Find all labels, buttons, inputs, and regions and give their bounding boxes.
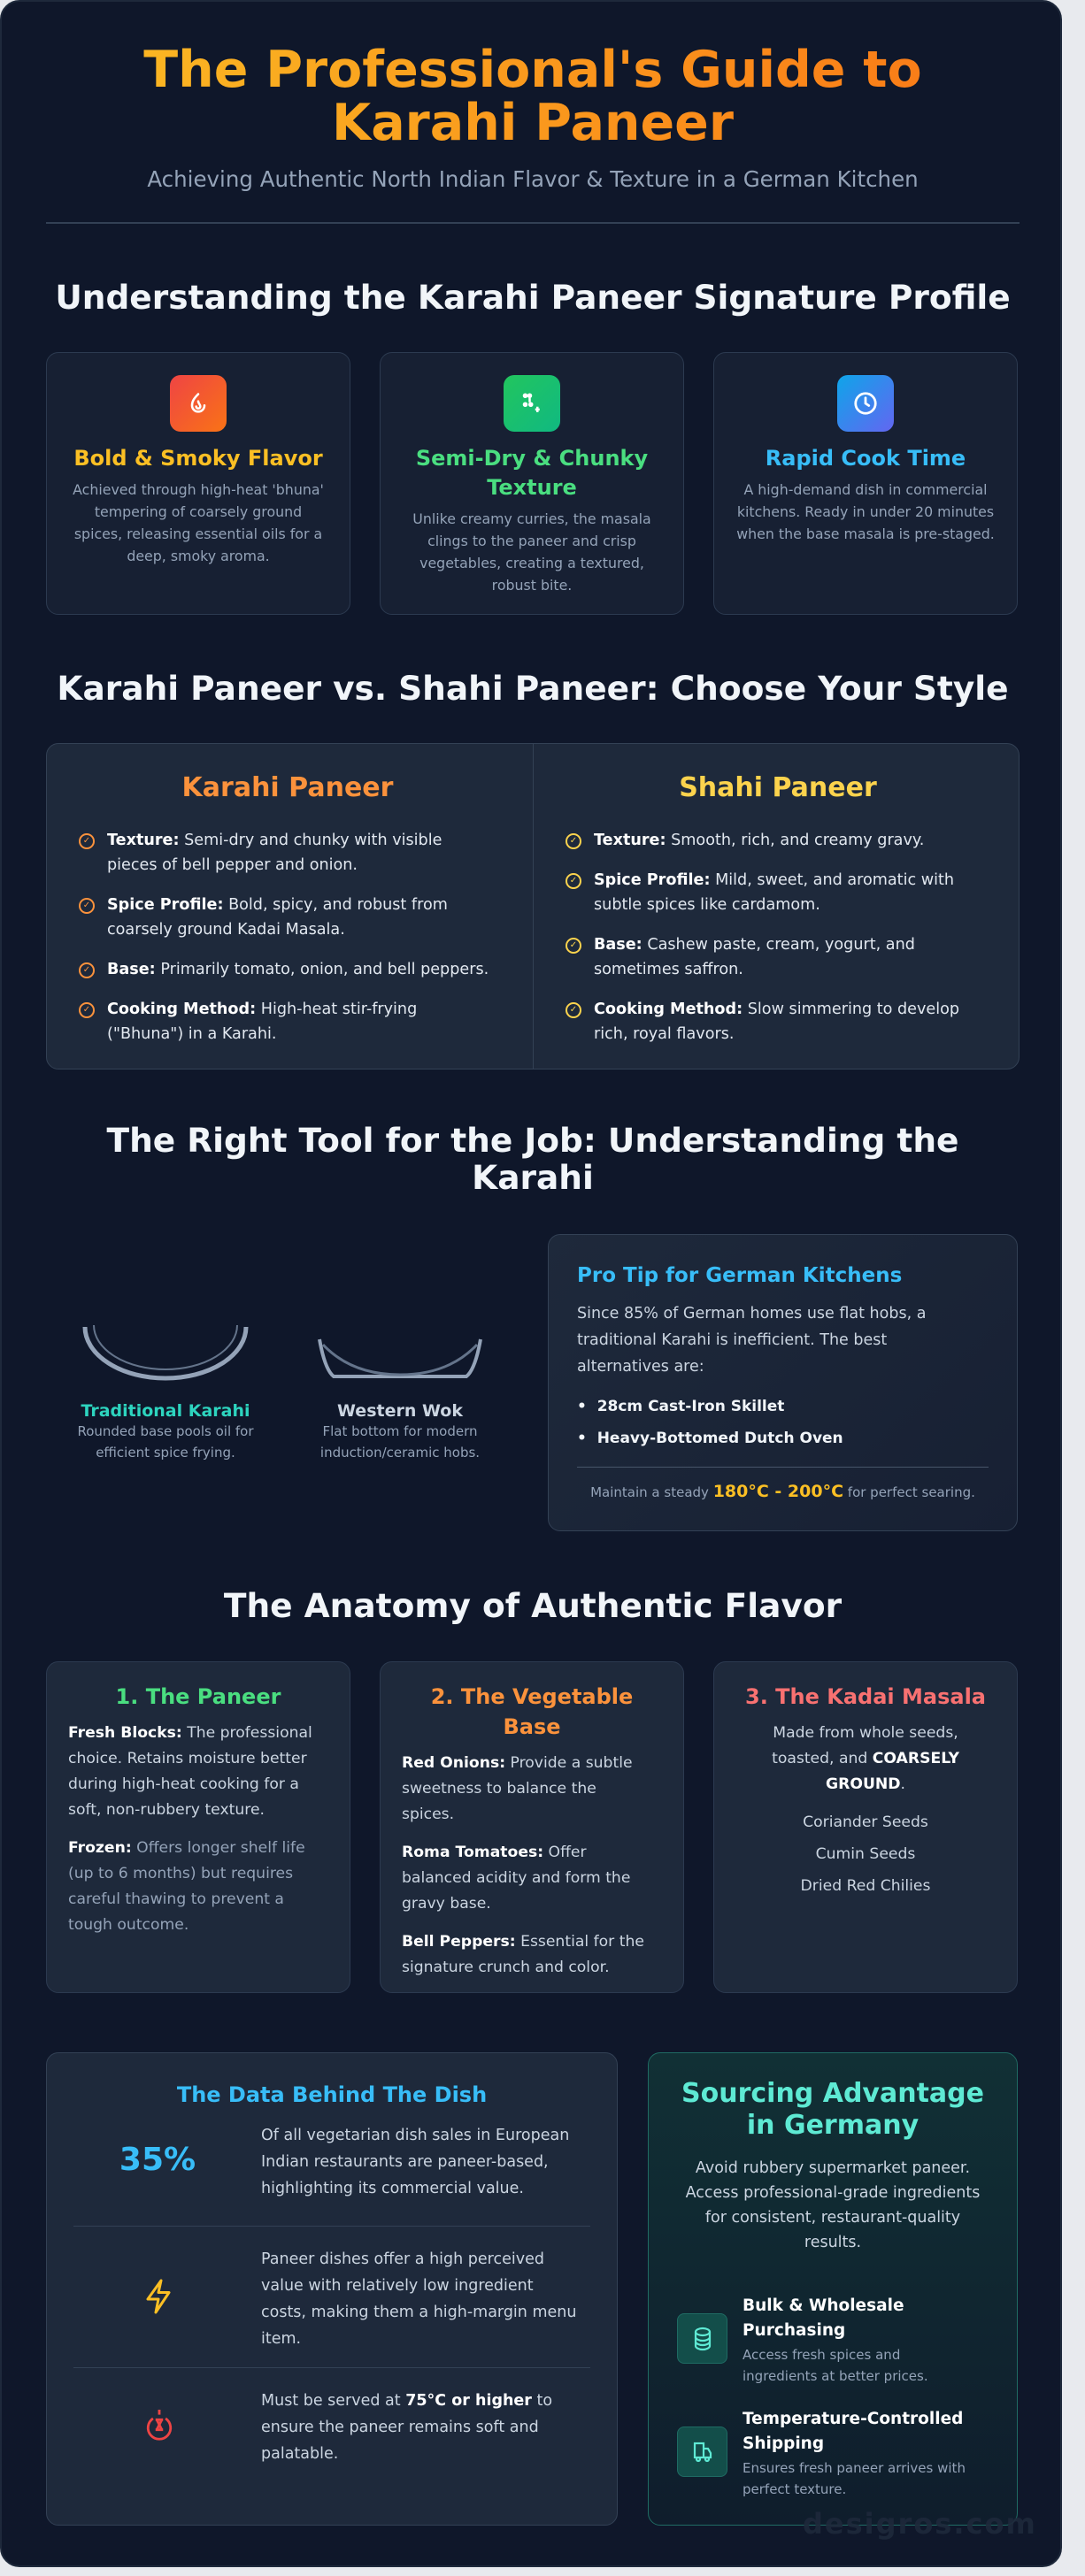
illustration: traditional karahi <box>77 1325 254 1460</box>
icon: chunks <box>504 375 560 432</box>
callout: pro tip: • 28cm Cast-Iron Skillet <box>577 1398 784 1415</box>
card: bold & smoky: Bold & Smoky Flavor <box>73 446 323 471</box>
heading: right tool: Karahi <box>472 1158 594 1197</box>
column: karahi: ✓ <box>83 901 90 910</box>
item: temperature shipping: Temperature-Controlled Shipping <box>743 2410 963 2453</box>
column: shahi: Shahi Paneer <box>679 772 877 803</box>
callout: pro tip: Maintain a steady 180°C - 200°C for perfect searing. <box>590 1482 975 1501</box>
card: paneer: 1. The Paneer <box>116 1684 281 1709</box>
card: kadai masala: Cumin Seeds <box>816 1845 915 1863</box>
column: shahi: ✓ <box>570 940 577 950</box>
card: paneer: Frozen: Offers longer shelf life (up to 6 months) but requires careful thawing to prevent a tough outcome. <box>68 1839 305 1934</box>
card: semi-dry texture: Semi-Dry & Chunky <box>416 446 648 471</box>
stat: 35%: 35% <box>119 2142 196 2178</box>
column: shahi: ✓ <box>570 1005 577 1015</box>
heading: right tool <box>106 1121 958 1197</box>
title: The Professional's Guide to <box>143 41 922 99</box>
subtitle: Achieving Authentic North Indian Flavor & Texture in a German Kitchen <box>147 166 919 192</box>
card: kadai masala: Dried Red Chilies <box>801 1877 930 1895</box>
card: semi-dry texture: Unlike creamy curries, the masala clings to the paneer and crisp vegetables, creating a textured, robust bite. <box>412 510 651 594</box>
card: vegetable base: Base <box>503 1714 561 1739</box>
heading: signature profile: Understanding the Karahi Paneer Signature Profile <box>55 278 1011 317</box>
column: karahi: Texture: Semi-dry and chunky with visible pieces of bell pepper and onion. <box>107 832 442 874</box>
panel: data behind the dish <box>46 2052 618 2526</box>
card: vegetable base: Red Onions: Provide a subtle sweetness to balance the <box>402 1754 633 1798</box>
card: paneer <box>46 1661 350 1993</box>
card: rapid cook: A high-demand dish in commercial kitchens. Ready in under 20 minutes when the base masala is pre-staged. <box>736 481 995 542</box>
column: karahi: ✓ <box>83 836 90 846</box>
card: semi-dry texture: Texture <box>487 475 577 500</box>
stat: temperature: Must be served at 75°C or higher to ensure the paneer remains soft and palatable. <box>261 2392 552 2463</box>
column: shahi: Spice Profile: Mild, sweet, and aromatic with subtle spices like cardamom. <box>594 871 954 914</box>
card: bold & smoky <box>46 352 350 615</box>
column: shahi: Cooking Method: Slow simmering to develop rich, royal flavors. <box>594 1000 959 1043</box>
card: kadai masala: 3. The Kadai Masala <box>745 1684 986 1709</box>
card: vegetable base: 2. The Vegetable <box>431 1684 633 1709</box>
card: vegetable base: balanced acidity and form the gravy base. <box>402 1869 630 1913</box>
column: karahi: Cooking Method: High-heat stir-frying ("Bhuna") in a Karahi. <box>107 1000 417 1043</box>
card: vegetable base: Bell Peppers: Essential for the signature crunch and color. <box>402 1933 644 1976</box>
stat: 35% <box>73 2115 590 2227</box>
column: shahi: ✓ <box>570 836 577 846</box>
column: shahi: ✓ <box>570 876 577 886</box>
card: kadai masala: Coriander Seeds <box>803 1813 928 1831</box>
item: bulk purchasing: Access fresh spices and ingredients at better prices. <box>743 2347 928 2384</box>
panel: sourcing advantage: Avoid rubbery supermarket paneer. Access professional-grade ingredients for consistent, restaurant-quality results. <box>686 2159 980 2251</box>
watermark: desigros.com <box>803 2507 1037 2541</box>
card: paneer: Fresh Blocks: The professional choice. Retains moisture better during high-heat cooking for a soft, non-rubbery texture. <box>68 1724 312 1819</box>
panel: sourcing advantage: in Germany <box>747 2110 919 2141</box>
icon: clock <box>837 375 894 432</box>
panel: feature cards <box>46 352 1018 615</box>
column: shahi <box>566 772 959 1043</box>
item: temperature shipping <box>677 2410 966 2497</box>
panel: data behind the dish: The Data Behind The Dish <box>177 2082 487 2107</box>
card: rapid cook: Rapid Cook Time <box>766 446 966 471</box>
card: vegetable base: Roma Tomatoes: Offer <box>402 1844 587 1861</box>
item: bulk purchasing: Bulk & Wholesale Purchasing <box>743 2296 904 2340</box>
panel: anatomy cards <box>46 1661 1018 1993</box>
callout: pro tip: Since 85% of German homes use flat hobs, a traditional Karahi is inefficient. The best alternatives are: <box>577 1305 926 1376</box>
callout: pro tip <box>548 1234 1018 1531</box>
stat: margin <box>73 2227 590 2368</box>
panel: comparison <box>46 743 1020 1070</box>
title <box>2 43 1064 150</box>
stat: margin: Paneer dishes offer a high perceived value with relatively low ingredient costs, making them a high-margin menu item. <box>261 2250 576 2348</box>
illustration: traditional karahi: Rounded base pools oil for <box>77 1423 254 1439</box>
card: kadai masala: Made from whole seeds, toasted, and COARSELY GROUND. <box>772 1724 959 1793</box>
column: karahi: Base: Primarily tomato, onion, and bell peppers. <box>107 961 489 978</box>
illustration: western wok: induction/ceramic hobs. <box>320 1445 480 1460</box>
column: karahi: Karahi Paneer <box>182 772 393 803</box>
item: temperature shipping: Ensures fresh paneer arrives with perfect texture. <box>743 2460 966 2497</box>
illustration: western wok: Flat bottom for modern <box>322 1423 478 1439</box>
illustration: western wok: Western Wok <box>337 1401 463 1421</box>
panel: sourcing advantage <box>648 2052 1018 2526</box>
heading: anatomy: The Anatomy of Authentic Flavor <box>224 1586 842 1625</box>
card: kadai masala <box>713 1661 1018 1993</box>
illustration: western wok <box>318 1339 482 1460</box>
illustration: traditional karahi: Traditional Karahi <box>81 1401 250 1421</box>
column: karahi: Spice Profile: Bold, spicy, and robust from coarsely ground Kadai Masala. <box>107 896 448 939</box>
illustration: traditional karahi: efficient spice frying. <box>96 1445 235 1460</box>
column: karahi: ✓ <box>83 965 90 975</box>
column: karahi: ✓ <box>83 1005 90 1015</box>
card: rapid cook <box>713 352 1018 615</box>
title: Karahi Paneer <box>332 94 734 152</box>
column: karahi <box>79 772 489 1043</box>
item: bulk purchasing <box>677 2296 928 2384</box>
callout: pro tip: Pro Tip for German Kitchens <box>577 1264 902 1287</box>
stat: 35%: Of all vegetarian dish sales in European Indian restaurants are paneer-based, highlighting its commercial value. <box>261 2127 569 2197</box>
column: shahi: Texture: Smooth, rich, and creamy gravy. <box>594 832 924 849</box>
column: shahi: Base: Cashew paste, cream, yogurt, and sometimes saffron. <box>594 936 915 978</box>
icon: flame <box>170 375 227 432</box>
heading: right tool: The Right Tool for the Job: Understanding the <box>107 1121 958 1160</box>
card: vegetable base <box>380 1661 684 1993</box>
card: vegetable base: spices. <box>402 1806 454 1823</box>
card: bold & smoky: Achieved through high-heat 'bhuna' tempering of coarsely ground spices, releasing essential oils for a deep, smoky aroma. <box>73 481 324 564</box>
heading: comparison: Karahi Paneer vs. Shahi Paneer: Choose Your Style <box>57 669 1009 708</box>
panel: sourcing advantage: Sourcing Advantage <box>681 2078 984 2109</box>
card: semi-dry texture <box>380 352 684 615</box>
callout: pro tip: • Heavy-Bottomed Dutch Oven <box>577 1430 843 1447</box>
